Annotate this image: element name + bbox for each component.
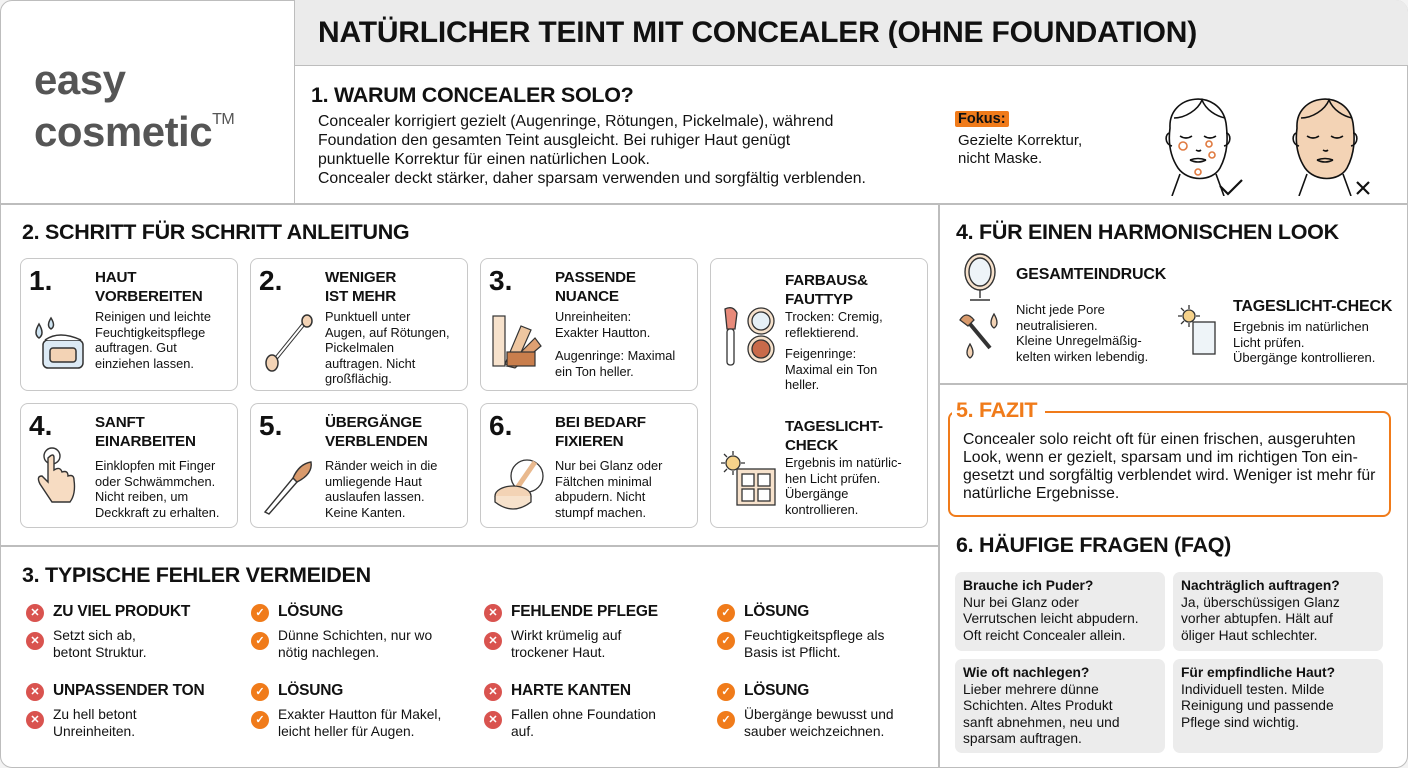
- icon: sun and mirror: [1178, 305, 1216, 355]
- card: farbaus & tageslicht: Trocken: Cremig,: [785, 309, 883, 324]
- card 2: großflächig.: [325, 371, 392, 386]
- card: farbaus & tageslicht: TAGESLICHT-: [785, 418, 883, 435]
- card 3: Unreinheiten:: [555, 309, 631, 324]
- gesamteindruck: kelten wirken lebendig.: [1016, 348, 1148, 364]
- card 1: Feuchtigkeitspflege: [95, 324, 205, 340]
- card 2: Pickelmalen: [325, 340, 394, 355]
- solution 2: ✓: [721, 635, 731, 647]
- card 5: ÜBERGÄNGE: [325, 414, 422, 431]
- solution 1: Dünne Schichten, nur wo: [278, 628, 432, 643]
- fazit text: gesetzt und sorgfältig verblendet wird. Weniger ist mehr für: [963, 467, 1375, 484]
- fokus callout: [955, 111, 1082, 167]
- error 2: ✕: [488, 607, 498, 619]
- gesamteindruck: Nicht jede Pore: [1016, 302, 1105, 317]
- icon: brush: [264, 461, 312, 515]
- faq 3: sanft abnehmen, neu und: [963, 714, 1120, 730]
- card 4: SANFT: [95, 414, 145, 431]
- solution 1: LÖSUNG: [278, 603, 343, 620]
- faq 4: [1173, 659, 1383, 753]
- faq 2: [1173, 572, 1383, 651]
- card 5: 5.: [259, 410, 282, 441]
- section 1: warum concealer solo: [311, 83, 1370, 196]
- card: farbaus & tageslicht: [710, 258, 928, 528]
- section 5: fazit: [948, 398, 1391, 517]
- fazit text: [963, 431, 1376, 502]
- error 3: Zu hell betont: [53, 707, 137, 722]
- icon: colour swatches: [492, 315, 542, 369]
- card 4: Einklopfen mit Finger: [95, 458, 215, 473]
- icon: powder: [494, 459, 544, 510]
- solution 2: ✓: [721, 607, 731, 619]
- faq 1: Brauche ich Puder?: [963, 578, 1093, 593]
- card 5: VERBLENDEN: [325, 433, 428, 450]
- card: farbaus & tageslicht: Maximal ein Ton: [785, 362, 877, 376]
- heading 2: 2. SCHRITT FÜR SCHRITT ANLEITUNG: [22, 220, 409, 244]
- error 3: Unreinheiten.: [53, 724, 135, 739]
- icon: faces: [1165, 98, 1370, 196]
- solution 3: leicht heller für Augen.: [278, 724, 415, 739]
- card 1: auftragen. Gut: [95, 340, 177, 355]
- solution 2: Basis ist Pflicht.: [744, 645, 841, 660]
- logo text: easy: [34, 56, 125, 103]
- faq 2: vorher abtupfen. Hält auf: [1181, 611, 1333, 626]
- error 1: ✕: [30, 607, 40, 619]
- fazit text: Look, wenn er gezielt, sparsam und im richtigen Ton ein-: [963, 449, 1358, 466]
- error 2: trockener Haut.: [511, 645, 605, 660]
- card 4: 4.: [29, 410, 52, 441]
- solution 4: sauber weichzeichnen.: [744, 724, 884, 739]
- card 2: Punktuell unter: [325, 309, 410, 324]
- card 4: Nicht reiben, um: [95, 489, 188, 504]
- solution 1: [251, 602, 432, 660]
- faq 4: Für empfindliche Haut?: [1181, 665, 1335, 680]
- solution 3: Exakter Hautton für Makel,: [278, 707, 441, 722]
- card 1: VORBEREITEN: [95, 288, 203, 305]
- card 4: Deckkraft zu erhalten.: [95, 504, 219, 520]
- card 1: HAUT: [95, 269, 136, 286]
- heading 6: 6. HÄUFIGE FRAGEN (FAQ): [956, 533, 1231, 557]
- card 4: [20, 403, 238, 528]
- faq 3: [955, 659, 1165, 753]
- tageslicht check: Ergebnis im natürlichen: [1233, 319, 1369, 334]
- card 2: IST MEHR: [325, 288, 396, 305]
- gesamteindruck: Kleine Unregelmäßig-: [1016, 333, 1142, 348]
- card: farbaus & tageslicht: FARBAUS&: [785, 272, 868, 289]
- error 2: [484, 603, 658, 660]
- faq 1: Verrutschen leicht abpudern.: [963, 611, 1139, 626]
- icon: mirror: [964, 253, 996, 301]
- solution 4: [717, 681, 894, 739]
- card 3: PASSENDE: [555, 269, 636, 286]
- solution 1: nötig nachlegen.: [278, 645, 379, 660]
- error 3: [26, 682, 204, 739]
- intro text: Concealer deckt stärker, daher sparsam verwenden und sorgfältig verblenden.: [318, 170, 866, 187]
- faq 1: [955, 572, 1165, 651]
- card 5: auslaufen lassen.: [325, 489, 425, 504]
- heading 4: 4. FÜR EINEN HARMONISCHEN LOOK: [956, 220, 1339, 244]
- solution 4: LÖSUNG: [744, 682, 809, 699]
- solution 1: ✓: [255, 635, 265, 647]
- error 4: ✕: [488, 714, 498, 726]
- card: farbaus & tageslicht: reflektierend.: [785, 324, 859, 340]
- error 3: UNPASSENDER TON: [53, 682, 204, 699]
- card 1: [20, 258, 238, 391]
- card 1: Reinigen und leichte: [95, 309, 211, 324]
- title bar: [295, 0, 1408, 66]
- fazit text: natürliche Ergebnisse.: [963, 485, 1119, 502]
- intro text: punktuelle Korrektur für einen natürlichen Look.: [318, 151, 650, 168]
- card 3: NUANCE: [555, 288, 619, 305]
- card 6: Nur bei Glanz oder: [555, 458, 662, 473]
- card: farbaus & tageslicht: FAUTTYP: [785, 291, 853, 308]
- faq 2: Nachträglich auftragen?: [1181, 578, 1340, 593]
- error 1: Setzt sich ab,: [53, 628, 136, 643]
- heading 5: 5. FAZIT: [956, 398, 1037, 422]
- error 4: auf.: [511, 724, 534, 739]
- card 1: einziehen lassen.: [95, 356, 194, 370]
- error 4: ✕: [488, 686, 498, 698]
- error 2: Wirkt krümelig auf: [511, 628, 621, 643]
- card 5: Keine Kanten.: [325, 504, 405, 520]
- intro text: [318, 113, 866, 187]
- solution 4: ✓: [721, 686, 731, 698]
- solution 2: Feuchtigkeitspflege als: [744, 628, 884, 643]
- solution 3: ✓: [255, 714, 265, 726]
- card 5: [250, 403, 468, 528]
- section 2: schritt für schritt: [20, 220, 928, 528]
- logo panel: [0, 0, 295, 203]
- fokus callout: nicht Maske.: [958, 150, 1042, 167]
- card 3: ein Ton heller.: [555, 364, 634, 378]
- card 5: Ränder weich in die: [325, 458, 437, 473]
- solution 2: LÖSUNG: [744, 603, 809, 620]
- faq 3: Lieber mehrere dünne: [963, 682, 1099, 696]
- icon: brush and compact: [724, 307, 775, 366]
- card 6: 6.: [489, 410, 512, 441]
- solution 3: ✓: [255, 686, 265, 698]
- intro text: Concealer korrigiert gezielt (Augenringe, Rötungen, Pickelmale), während: [318, 113, 833, 130]
- faq 2: öliger Haut schlechter.: [1181, 628, 1318, 642]
- error 2: ✕: [488, 635, 498, 647]
- solution 2: [717, 602, 884, 660]
- icon: sun and window: [721, 451, 776, 506]
- card 2: Augen, auf Rötungen,: [325, 324, 450, 340]
- card 2: auftragen. Nicht: [325, 356, 415, 370]
- solution 4: Übergänge bewusst und: [744, 707, 894, 722]
- icon: cream jar: [35, 316, 84, 369]
- gesamteindruck: GESAMTEINDRUCK: [1016, 266, 1166, 283]
- fazit text: Concealer solo reicht oft für einen frischen, ausgeruhten: [963, 431, 1356, 448]
- card 4: EINARBEITEN: [95, 433, 196, 450]
- error 1: betont Struktur.: [53, 645, 147, 660]
- tageslicht check: Übergänge kontrollieren.: [1233, 350, 1375, 365]
- card 5: umliegende Haut: [325, 474, 422, 488]
- faq 4: Individuell testen. Milde: [1181, 682, 1324, 696]
- card 6: abpudern. Nicht: [555, 489, 645, 504]
- card: farbaus & tageslicht: Ergebnis im natürlic-: [785, 455, 902, 470]
- card 6: BEI BEDARF: [555, 414, 646, 431]
- card: farbaus & tageslicht: heller.: [785, 377, 819, 392]
- gesamteindruck: [1016, 266, 1166, 364]
- card 2: 2.: [259, 265, 282, 296]
- card 1: 1.: [29, 265, 52, 296]
- error 4: [484, 682, 656, 739]
- solution 1: ✓: [255, 607, 265, 619]
- card 3: 3.: [489, 265, 512, 296]
- solution 3: [251, 681, 441, 739]
- card 3: Exakter Hautton.: [555, 324, 650, 340]
- card 3: [480, 258, 698, 391]
- error 3: ✕: [30, 714, 40, 726]
- card: farbaus & tageslicht: hen Licht prüfen.: [785, 470, 880, 486]
- card: farbaus & tageslicht: Übergänge: [785, 486, 848, 501]
- card: farbaus & tageslicht: CHECK: [785, 437, 838, 454]
- card 6: Fältchen minimal: [555, 474, 652, 488]
- faq 1: Nur bei Glanz oder: [963, 594, 1079, 610]
- error 1: ✕: [30, 635, 40, 647]
- icon: finger: [38, 447, 76, 503]
- solution 3: LÖSUNG: [278, 682, 343, 699]
- error 2: FEHLENDE PFLEGE: [511, 603, 658, 620]
- card 2: [250, 258, 468, 391]
- faq 3: sparsam auftragen.: [963, 731, 1082, 746]
- fokus callout: Gezielte Korrektur,: [958, 132, 1082, 149]
- error 4: Fallen ohne Foundation: [511, 707, 656, 722]
- tageslicht check: TAGESLICHT-CHECK: [1233, 298, 1392, 315]
- intro text: Foundation den gesamten Teint ausgleicht. Bei ruhiger Haut genügt: [318, 132, 790, 149]
- fokus callout: Fokus:: [958, 111, 1006, 127]
- error 4: HARTE KANTEN: [511, 682, 631, 699]
- tageslicht check: Licht prüfen.: [1233, 334, 1305, 350]
- faq 1: Oft reicht Concealer allein.: [963, 628, 1126, 642]
- divider line: [0, 203, 1408, 204]
- section 3: typische fehler: [22, 563, 894, 739]
- heading 3: 3. TYPISCHE FEHLER VERMEIDEN: [22, 563, 371, 587]
- section 6: faq: [955, 533, 1383, 753]
- logo text: cosmeticTM: [34, 108, 234, 155]
- card 3: Augenringe: Maximal: [555, 348, 675, 363]
- card 6: stumpf machen.: [555, 504, 646, 520]
- faq 3: Schichten. Altes Produkt: [963, 698, 1113, 713]
- logo text: [34, 56, 234, 155]
- card 2: WENIGER: [325, 269, 396, 286]
- faq 3: Wie oft nachlegen?: [963, 665, 1089, 680]
- faq 4: Reinigung und passende: [1181, 698, 1334, 713]
- icon: brush and drops: [959, 312, 998, 359]
- card 6: [480, 403, 698, 528]
- card: farbaus & tageslicht: Feigenringe:: [785, 346, 856, 361]
- error 1: [26, 603, 190, 660]
- title: NATÜRLICHER TEINT MIT CONCEALER (OHNE FOUNDATION): [318, 16, 1197, 49]
- tageslicht check: [1233, 298, 1392, 365]
- card: farbaus & tageslicht: kontrollieren.: [785, 502, 858, 516]
- card 6: FIXIEREN: [555, 433, 623, 450]
- faq 2: Ja, überschüssigen Glanz: [1181, 594, 1340, 610]
- gesamteindruck: neutralisieren.: [1016, 318, 1098, 332]
- card 4: oder Schwämmchen.: [95, 474, 215, 488]
- section 4: harmonischer look: [956, 220, 1392, 365]
- heading 1: 1. WARUM CONCEALER SOLO?: [311, 83, 633, 107]
- solution 4: ✓: [721, 714, 731, 726]
- error 3: ✕: [30, 686, 40, 698]
- error 1: ZU VIEL PRODUKT: [53, 603, 190, 620]
- icon: applicator: [265, 314, 313, 372]
- faq 4: Pflege sind wichtig.: [1181, 714, 1299, 730]
